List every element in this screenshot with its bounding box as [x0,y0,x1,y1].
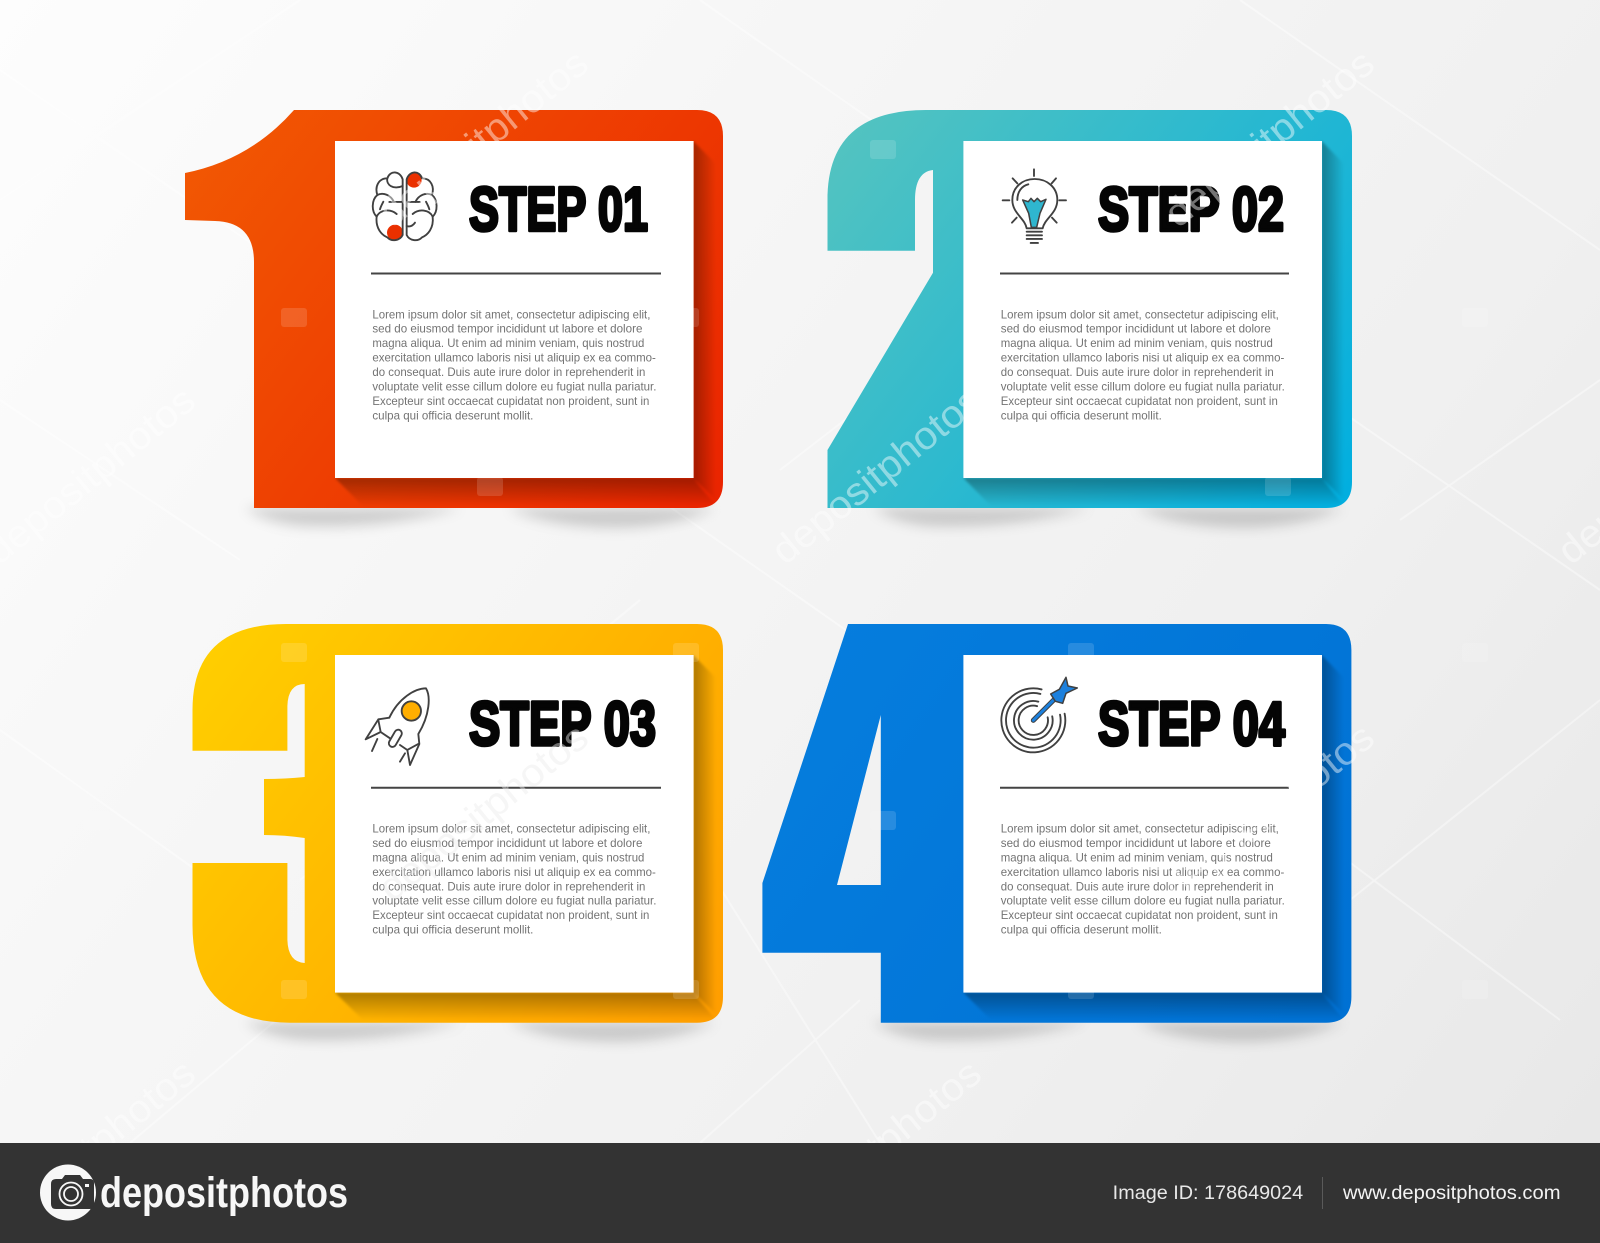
body text: do consequat. Duis aute irure dolor in reprehenderit in [372,880,645,893]
icon: brain [373,172,437,241]
numeral 4 shape [762,624,1351,1023]
body text: voluptate velit esse cillum dolore eu fugiat nulla pariatur. [372,380,656,393]
heading: STEP 04 [1098,690,1285,759]
card shadow [335,141,716,506]
watermark text: depositphotos [371,41,597,236]
body text [372,308,656,422]
body text: do consequat. Duis aute irure dolor in reprehenderit in [372,366,645,379]
icon: rocket [366,688,429,765]
watermark text: depositphotos [371,715,597,910]
body text: exercitation ullamco laboris nisi ut aliquip ex ea commo- [372,866,656,879]
card [335,655,694,993]
card [963,655,1322,993]
body text: sed do eiusmod tempor incididunt ut labore et dolore [372,323,642,336]
footer bar [0,1143,1600,1243]
website url: www.depositphotos.com [1342,1182,1560,1204]
body text: do consequat. Duis aute irure dolor in reprehenderit in [1001,366,1274,379]
body text: culpa qui officia deserunt mollit. [1001,924,1162,937]
icon: target with arrow [1001,677,1077,752]
panel: step 3 [192,624,723,1023]
body text: Excepteur sint occaecat cupidatat non proident, sunt in [1001,395,1278,408]
body text: Excepteur sint occaecat cupidatat non proident, sunt in [1001,909,1278,922]
body text: voluptate velit esse cillum dolore eu fugiat nulla pariatur. [372,895,656,908]
body text: magna aliqua. Ut enim ad minim veniam, quis nostrud [1001,337,1273,350]
numeral 3 shape [192,624,723,1023]
body text: Excepteur sint occaecat cupidatat non proident, sunt in [372,909,649,922]
body text: Excepteur sint occaecat cupidatat non proident, sunt in [372,395,649,408]
card [335,141,694,478]
body text: magna aliqua. Ut enim ad minim veniam, quis nostrud [372,337,644,350]
body text: sed do eiusmod tempor incididunt ut labore et dolore [1001,323,1271,336]
card shadow [963,141,1344,506]
panel: step 1 [185,110,723,508]
body text: Lorem ipsum dolor sit amet, consectetur adipiscing elit, [1001,308,1279,321]
body text [1001,308,1285,422]
body text: voluptate velit esse cillum dolore eu fugiat nulla pariatur. [1001,895,1285,908]
panel: step 4 [762,624,1351,1023]
body text: culpa qui officia deserunt mollit. [372,924,533,937]
body text: culpa qui officia deserunt mollit. [1001,409,1162,422]
body text: culpa qui officia deserunt mollit. [372,409,533,422]
body text: magna aliqua. Ut enim ad minim veniam, quis nostrud [372,851,644,864]
image id: Image ID: 178649024 [1113,1182,1303,1204]
heading: STEP 01 [469,176,648,244]
body text: Lorem ipsum dolor sit amet, consectetur adipiscing elit, [372,823,650,836]
panel: step 2 [828,110,1352,508]
watermark text: depositphotos [764,378,990,573]
body text: Lorem ipsum dolor sit amet, consectetur adipiscing elit, [372,308,650,321]
body text: do consequat. Duis aute irure dolor in reprehenderit in [1001,880,1274,893]
heading: STEP 03 [469,690,656,759]
watermark camera icons [84,140,1488,999]
icon: light bulb [1003,169,1066,243]
numeral 2 shape [828,110,1352,508]
card shadow [963,655,1344,1020]
ground shadows [245,508,1343,1042]
body text: sed do eiusmod tempor incididunt ut labore et dolore [372,837,642,850]
watermark text: depositphotos [1157,715,1383,910]
card [963,141,1322,478]
body text: sed do eiusmod tempor incididunt ut labore et dolore [1001,837,1271,850]
logo: camera badge [40,1164,96,1220]
body text [1001,823,1285,937]
numeral 1 shape [185,110,723,508]
logo wordmark: depositphotos [100,1169,348,1217]
watermark text: depositphotos [764,1051,990,1243]
body text: exercitation ullamco laboris nisi ut aliquip ex ea commo- [1001,866,1284,879]
body text: exercitation ullamco laboris nisi ut aliquip ex ea commo- [372,352,656,365]
heading: STEP 02 [1098,176,1284,244]
body text: voluptate velit esse cillum dolore eu fugiat nulla pariatur. [1001,380,1285,393]
body text: exercitation ullamco laboris nisi ut aliquip ex ea commo- [1001,352,1284,365]
body text [372,823,656,937]
body text: Lorem ipsum dolor sit amet, consectetur adipiscing elit, [1001,823,1279,836]
body text: magna aliqua. Ut enim ad minim veniam, quis nostrud [1001,851,1273,864]
card shadow [335,655,716,1020]
watermark text: depositphotos [1157,41,1383,236]
